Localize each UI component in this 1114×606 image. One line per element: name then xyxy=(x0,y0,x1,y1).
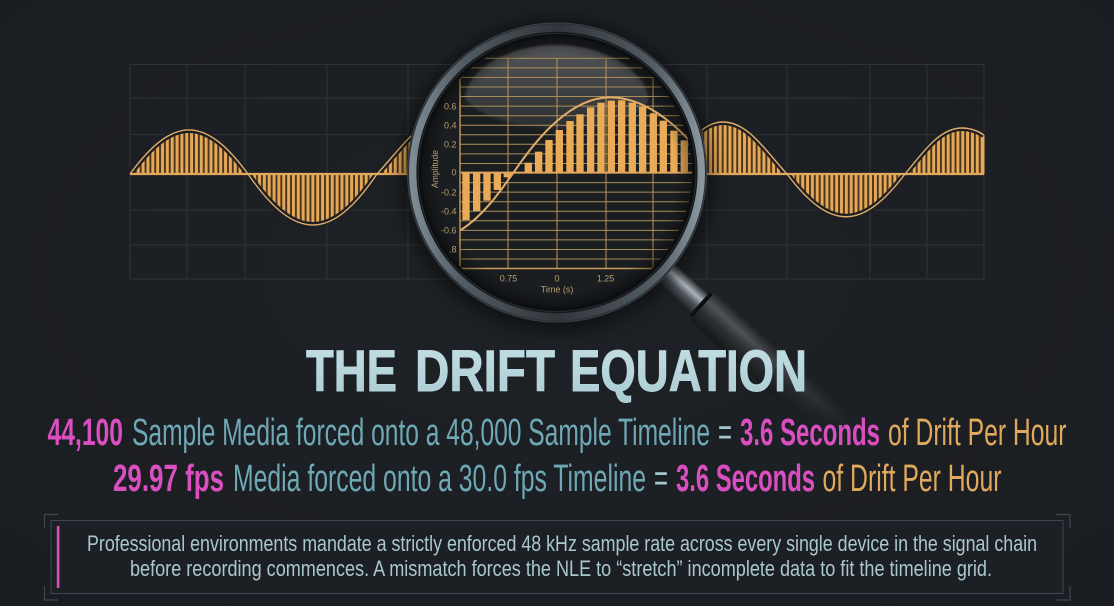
chart y axis labels: -0.2 xyxy=(441,188,456,198)
pink accent bar xyxy=(57,526,59,588)
magnifying glass lens xyxy=(401,20,713,332)
chart x axis labels: 0.75 xyxy=(500,274,517,284)
title: EQUATION xyxy=(570,339,807,404)
chart x axis labels: Time (s) xyxy=(541,284,573,294)
chart y axis labels: 0.2 xyxy=(444,140,456,150)
equation line: video frame rate: 29.97 fps xyxy=(113,458,224,500)
equation line: audio sample rate: 3.6 Seconds xyxy=(740,412,880,454)
title: DRIFT xyxy=(415,339,555,404)
magnified chart xyxy=(422,38,700,308)
title: THE xyxy=(306,339,397,404)
title xyxy=(306,339,807,404)
chart y axis labels: 0 xyxy=(451,168,456,178)
equation line: video frame rate: Media forced onto a 30.0 fps Timeline xyxy=(233,458,646,500)
equation line: audio sample rate: 44,100 xyxy=(48,412,123,454)
equation line: audio sample rate: Sample Media forced onto a 48,000 Sample Timeline xyxy=(132,412,710,454)
chart y axis labels: 0.6 xyxy=(444,102,456,112)
magnifying glass handle xyxy=(648,254,859,450)
chart x axis labels: 1.25 xyxy=(597,274,614,284)
callout text xyxy=(87,531,1037,581)
equation line: video frame rate: = xyxy=(654,458,668,500)
chart x axis labels xyxy=(500,274,614,294)
callout panel xyxy=(44,514,1070,600)
chart y axis labels xyxy=(441,102,456,254)
lens highlight xyxy=(465,45,648,129)
equation line: video frame rate: of Drift Per Hour xyxy=(822,458,1002,500)
chart y axis labels: 0.4 xyxy=(444,120,456,130)
chart y axis labels: -0.6 xyxy=(441,226,456,236)
sampled waveform xyxy=(130,122,984,225)
lens edge vignette xyxy=(422,38,692,308)
background grid xyxy=(130,64,984,279)
equation line: audio sample rate: = xyxy=(718,412,732,454)
equation line: video frame rate: 3.6 Seconds xyxy=(676,458,815,500)
chart y axis labels: .8 xyxy=(449,244,456,254)
chart y axis title: Amplitude xyxy=(430,150,440,188)
chart y axis labels: -0.4 xyxy=(441,206,456,216)
sample bars xyxy=(461,97,693,230)
chart x axis labels: 0 xyxy=(554,274,560,284)
